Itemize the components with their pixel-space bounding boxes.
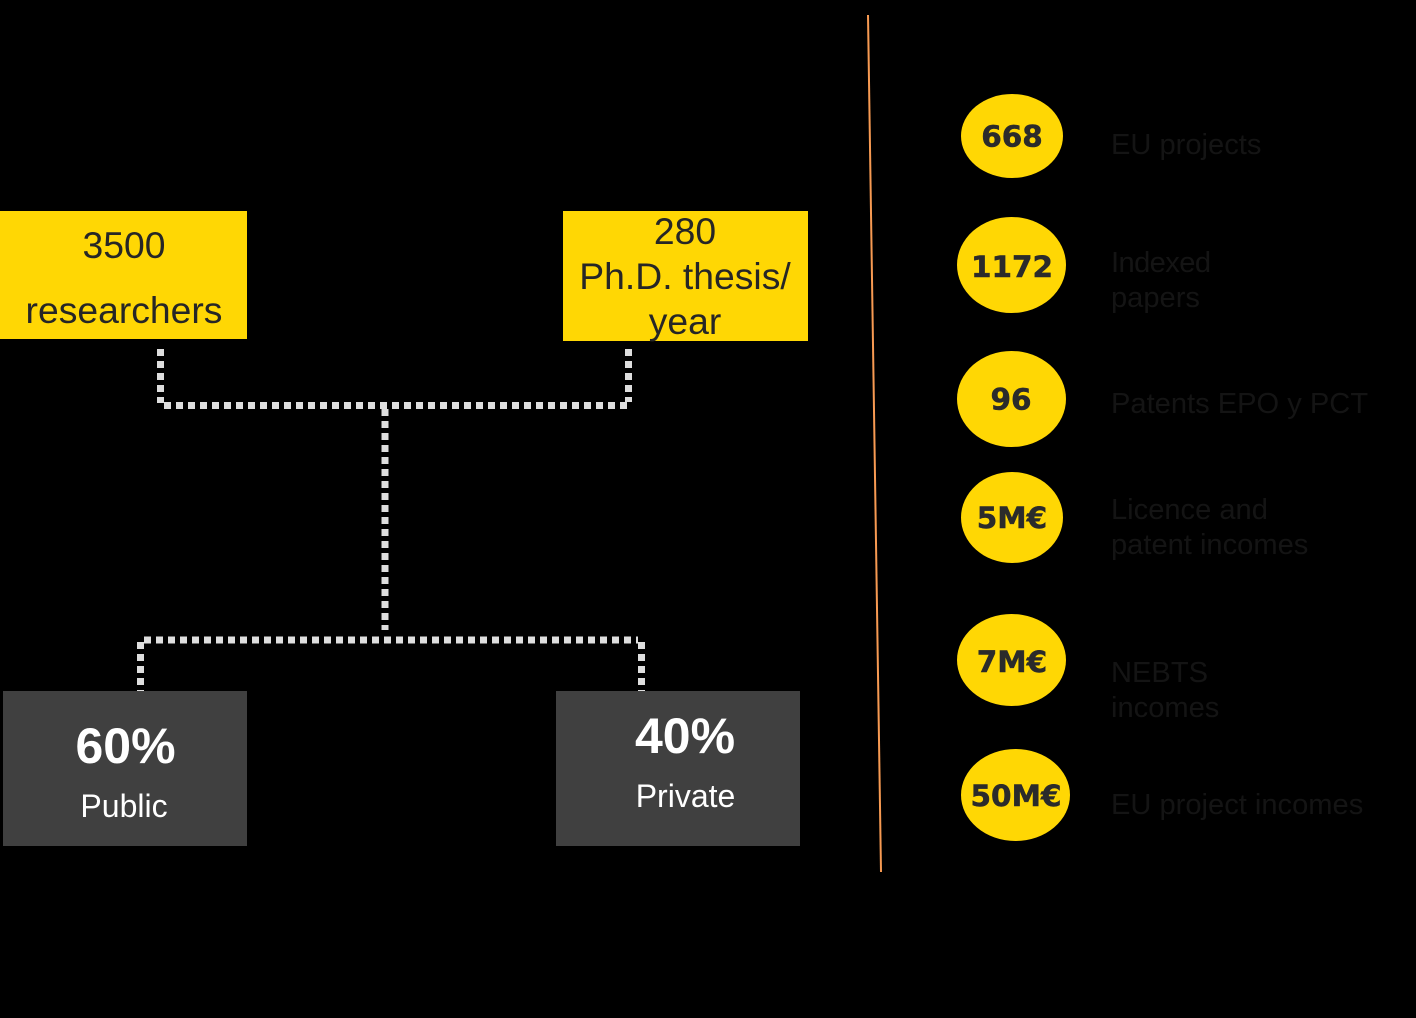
stat: 5M€ licence and patent incomes — [961, 472, 1308, 563]
stat: 668 EU projects: EU projects — [1111, 129, 1261, 161]
stat: 7M€ NEBTS incomes: incomes — [1111, 692, 1219, 724]
stat: 50M€ EU project incomes: 50M€ — [971, 779, 1061, 813]
box: 40% private: 40% — [635, 708, 735, 764]
stat: 1172 indexed papers: 1172 — [971, 250, 1053, 284]
stat: 50M€ EU project incomes — [961, 749, 1363, 841]
stat: 5M€ licence and patent incomes: patent incomes — [1111, 529, 1308, 561]
box: 280 Ph.D. thesis per year — [563, 210, 808, 342]
box: 60% public: Public — [80, 788, 168, 824]
box: 3500 researchers: 3500 — [83, 224, 165, 266]
box: 40% private — [556, 691, 800, 846]
stat: 1172 indexed papers: Indexed — [1111, 247, 1211, 279]
box: 3500 researchers: researchers — [26, 289, 222, 331]
orange divider line — [868, 15, 881, 872]
box: 3500 researchers — [0, 211, 247, 339]
stat: 96 patents: Patents EPO y PCT — [1111, 388, 1368, 420]
dotted connector: centre to bottom boxes — [140, 640, 642, 691]
box: 40% private: Private — [636, 778, 735, 814]
stat: 50M€ EU project incomes: EU project incomes — [1111, 789, 1363, 821]
stat: 1172 indexed papers: papers — [1111, 282, 1200, 314]
stat: 5M€ licence and patent incomes: 5M€ — [977, 501, 1047, 535]
stat: 5M€ licence and patent incomes: Licence and — [1111, 494, 1268, 526]
box: 280 Ph.D. thesis per year: 280 — [654, 210, 716, 252]
stat: 96 patents — [957, 351, 1368, 447]
box: 280 Ph.D. thesis per year: Ph.D. thesis/ — [579, 255, 791, 297]
stat: 7M€ NEBTS incomes: NEBTS — [1111, 657, 1208, 689]
box: 280 Ph.D. thesis per year: year — [649, 300, 721, 342]
box: 60% public — [3, 691, 247, 846]
stat: 668 EU projects — [961, 94, 1261, 178]
stat: 668 EU projects: 668 — [981, 120, 1043, 154]
stat: 7M€ NEBTS incomes — [957, 614, 1219, 724]
stat: 1172 indexed papers — [957, 217, 1211, 314]
box: 60% public: 60% — [75, 718, 176, 774]
dotted connector: top boxes to centre — [160, 349, 628, 630]
stat: 7M€ NEBTS incomes: 7M€ — [977, 645, 1047, 679]
stat: 96 patents: 96 — [990, 382, 1032, 416]
